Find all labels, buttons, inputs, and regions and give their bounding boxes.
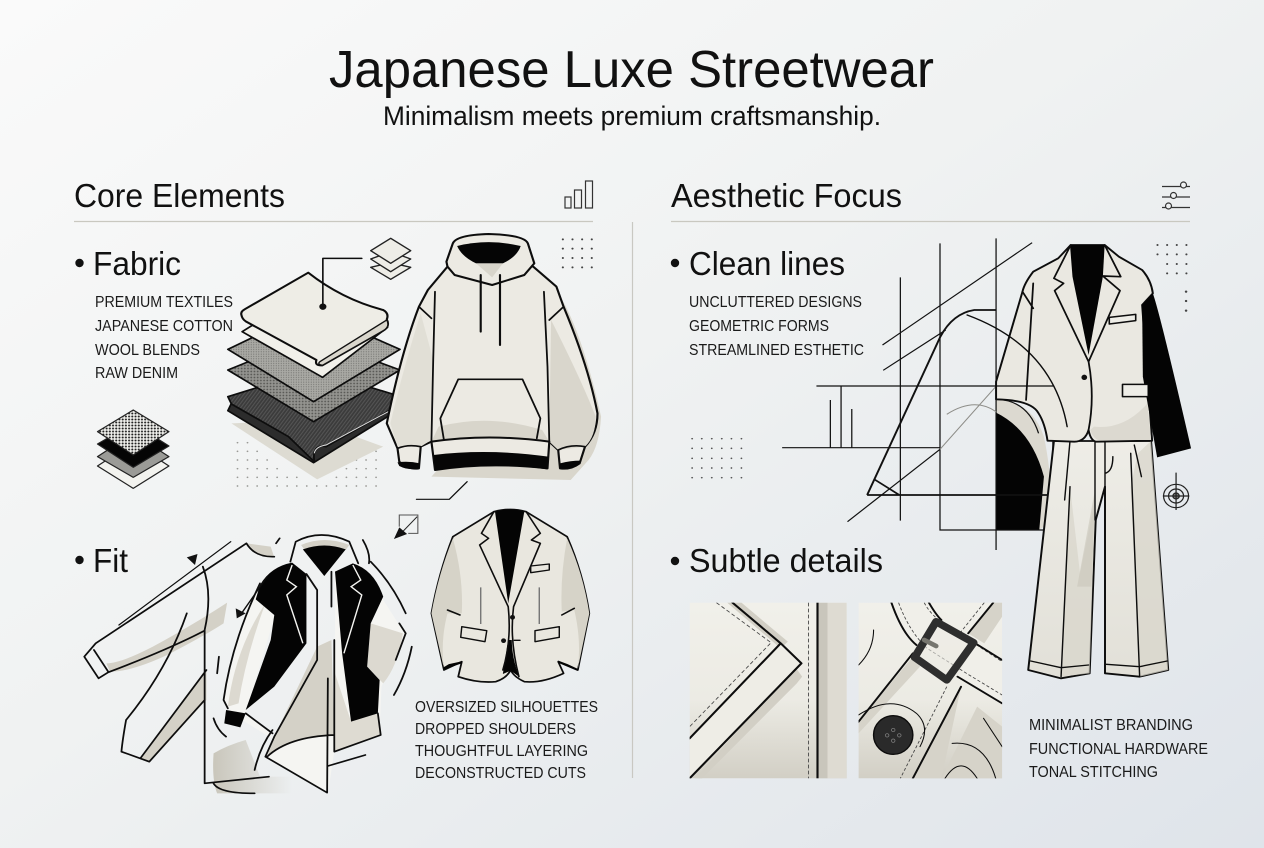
text: subtle details list: TONAL STITCHING — [1029, 764, 1158, 781]
dots: left of construction lines — [691, 438, 742, 478]
text: subtle details list: MINIMALIST BRANDING — [1029, 717, 1193, 734]
text: subtle details list: FUNCTIONAL HARDWARE — [1029, 741, 1208, 758]
text: fit list: THOUGHTFUL LAYERING — [415, 743, 588, 760]
arrow: shoulder — [119, 542, 231, 625]
dots: top right — [562, 238, 593, 268]
column divider — [632, 222, 634, 778]
illustration: tailored trousers — [1028, 441, 1168, 678]
leader line with pin — [319, 258, 362, 310]
dot grid under fabric — [237, 442, 377, 487]
icon: target — [1163, 473, 1189, 510]
heading: clean lines: Clean lines — [689, 245, 845, 282]
text: fit list: DROPPED SHOULDERS — [415, 721, 576, 738]
illustration: blazer — [431, 509, 589, 682]
icon: small layers — [371, 238, 411, 279]
title: Japanese Luxe Streetwear — [329, 41, 934, 99]
illustration: hoodie — [387, 234, 601, 480]
heading: fabric: Fabric — [93, 245, 181, 282]
text: clean lines list: GEOMETRIC FORMS — [689, 318, 829, 335]
illustration: deconstructed layered jacket — [84, 535, 412, 793]
panel: aesthetic focus — [671, 177, 1208, 781]
text: fabric list: JAPANESE COTTON — [95, 318, 233, 335]
panel: collar detail — [690, 603, 847, 778]
panel: core elements — [74, 177, 601, 793]
illustration: tailored jacket — [967, 245, 1191, 457]
geometric construction lines — [782, 238, 1062, 550]
text: fabric list — [95, 294, 233, 382]
heading: fit: Fit — [93, 542, 128, 579]
icon: sliders — [1162, 182, 1190, 209]
heading: fit — [75, 542, 128, 579]
arrow line under hoodie — [416, 482, 467, 499]
icon: fabric swatches — [97, 410, 169, 488]
text: subtle details list — [1029, 717, 1208, 781]
text: fabric list: RAW DENIM — [95, 365, 178, 382]
arrow: sleeve — [236, 577, 267, 618]
heading: subtle details: Subtle details — [689, 542, 883, 579]
icon: bar chart — [565, 181, 592, 208]
text: clean lines list — [689, 294, 864, 359]
illustration: folded fabric stack — [228, 258, 401, 479]
heading: aesthetic focus: Aesthetic Focus — [671, 177, 902, 214]
text: fabric list: WOOL BLENDS — [95, 342, 200, 359]
panel: buckle and button detail — [859, 603, 1002, 778]
text: fit list: DECONSTRUCTED CUTS — [415, 765, 586, 782]
text: clean lines list: UNCLUTTERED DESIGNS — [689, 294, 862, 311]
subtitle: Minimalism meets premium craftsmanship. — [383, 101, 881, 131]
icon: resize arrow — [394, 515, 418, 539]
dots: top right of jacket — [1156, 244, 1187, 312]
text: clean lines list: STREAMLINED ESTHETIC — [689, 342, 864, 359]
text: fit list: OVERSIZED SILHOUETTES — [415, 699, 598, 716]
text: fit list — [415, 699, 598, 782]
text: fabric list: PREMIUM TEXTILES — [95, 294, 233, 311]
heading: core elements: Core Elements — [74, 177, 285, 214]
construction curve over jacket — [967, 315, 1067, 427]
